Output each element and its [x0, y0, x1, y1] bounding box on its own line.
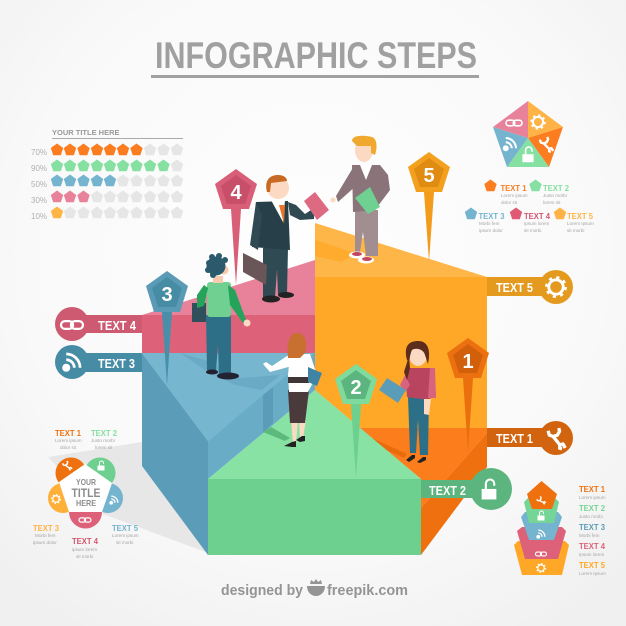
pyramid stack diagram: TEXT 4 [579, 541, 605, 551]
pentagon legend top right: TEXT 1 [500, 183, 527, 193]
rating chart: 70% [31, 148, 47, 157]
footer credit [221, 579, 408, 599]
label: text 2 [421, 468, 512, 510]
step marker 2 [335, 364, 377, 478]
step marker 1 [447, 338, 489, 452]
step 5 block: amber [315, 223, 487, 428]
pentagon legend top right: TEXT 5 [567, 211, 593, 221]
pyramid stack diagram: Lorem Ipsum [579, 571, 606, 576]
step marker 3: 3 [161, 284, 173, 306]
pentagon legend top right: Justo morbi [543, 193, 567, 198]
pentagon legend top right: TEXT 4 [524, 211, 550, 221]
pentagon legend top right: TEXT 2 [543, 183, 569, 193]
rating chart: 90% [31, 164, 47, 173]
step 1 block: orange [360, 428, 487, 555]
circular title diagram: TEXT 5 [112, 523, 138, 533]
pyramid stack diagram: TEXT 3 [579, 522, 605, 532]
pyramid stack diagram [514, 481, 606, 576]
circular title diagram: Morbi fem [35, 533, 56, 538]
pentagon legend top right: sit morbi [567, 228, 584, 233]
pyramid stack diagram: Lorem ipsum [579, 495, 606, 500]
step marker 1: 1 [462, 351, 474, 373]
label: text 1: TEXT 1 [496, 432, 533, 446]
pentagon legend top right: dolor sit [501, 200, 518, 205]
label: text 4 [55, 307, 142, 341]
circular title diagram: sit morbi [76, 554, 93, 559]
circular title diagram: TITLE [72, 486, 100, 500]
circular title diagram: sit morbi [116, 540, 133, 545]
pentagon legend top right: Morbi fem [479, 221, 500, 226]
label: text 5: TEXT 5 [496, 281, 533, 295]
step marker 4: 4 [230, 182, 242, 204]
step marker 2: 2 [350, 377, 362, 399]
step marker 5: 5 [423, 165, 435, 187]
pentagon legend top right: lorem sit [543, 200, 561, 205]
step marker 5 [408, 152, 450, 262]
rating chart: 10% [31, 212, 47, 221]
rating chart: YOUR TITLE HERE [52, 128, 120, 137]
footer credit: designed by [221, 583, 303, 599]
label: text 2: TEXT 2 [429, 484, 466, 498]
circular title diagram: TEXT 3 [33, 523, 59, 533]
footer credit: freepik.com [327, 583, 408, 599]
circular title diagram: ipsum lorem [72, 547, 97, 552]
circular title diagram: TEXT 4 [72, 536, 98, 546]
circular title diagram: dolor sit [60, 445, 77, 450]
circular title diagram: HERE [76, 498, 96, 508]
circular title diagram: Justo morbi [91, 438, 115, 443]
pyramid stack diagram: TEXT 2 [579, 503, 605, 513]
person: woman in white blouse [263, 333, 322, 447]
label: text 3 [55, 345, 142, 379]
pyramid stack diagram: TEXT 5 [579, 560, 605, 570]
circular title diagram: ipsum dolor [33, 540, 57, 545]
label: text 3: TEXT 3 [98, 357, 135, 371]
rating chart [31, 128, 183, 221]
rating chart: 30% [31, 196, 47, 205]
pentagon legend top right: sit morbi [524, 228, 541, 233]
pentagon legend top right [465, 101, 594, 233]
step marker 3 [146, 271, 188, 385]
pyramid stack diagram: Ipsum lorem [579, 552, 604, 557]
cast shadow [48, 442, 208, 553]
pentagon legend top right: ipsum dolor [479, 228, 503, 233]
person: man with briefcase [243, 175, 329, 302]
label: text 5 [487, 270, 573, 304]
step 4 block: pink [142, 260, 315, 353]
circular title diagram: lorem sit [95, 445, 113, 450]
step marker 4 [215, 169, 257, 285]
pentagon legend top right: Lorem ipsum [501, 193, 528, 198]
pentagon legend top right: Ipsum lorem [524, 221, 549, 226]
pyramid stack diagram: Justo morbi [579, 514, 603, 519]
person: woman in red top [379, 341, 436, 463]
person: blond man [330, 136, 390, 264]
pentagon legend top right: TEXT 3 [478, 211, 505, 221]
circular title diagram: TEXT 1 [55, 428, 81, 438]
label: text 4: TEXT 4 [98, 319, 136, 333]
label: text 1 [487, 421, 573, 455]
circular title diagram: YOUR [76, 477, 96, 487]
pyramid stack diagram: Morbi fem [579, 533, 600, 538]
circular title diagram: Lorem ipsum [55, 438, 82, 443]
step 3 block: blue [142, 352, 315, 555]
person: man in green sweater [192, 253, 250, 380]
step 2 block: green [208, 390, 421, 555]
pyramid stack diagram: TEXT 1 [579, 484, 605, 494]
rating chart: 50% [31, 180, 47, 189]
pentagon legend top right: Lorem Ipsum [567, 221, 594, 226]
title: INFOGRAPHIC STEPS [155, 35, 477, 76]
circular title diagram: TEXT 2 [91, 428, 117, 438]
circular title diagram [33, 428, 139, 559]
circular title diagram: Lorem ipsum [112, 533, 139, 538]
